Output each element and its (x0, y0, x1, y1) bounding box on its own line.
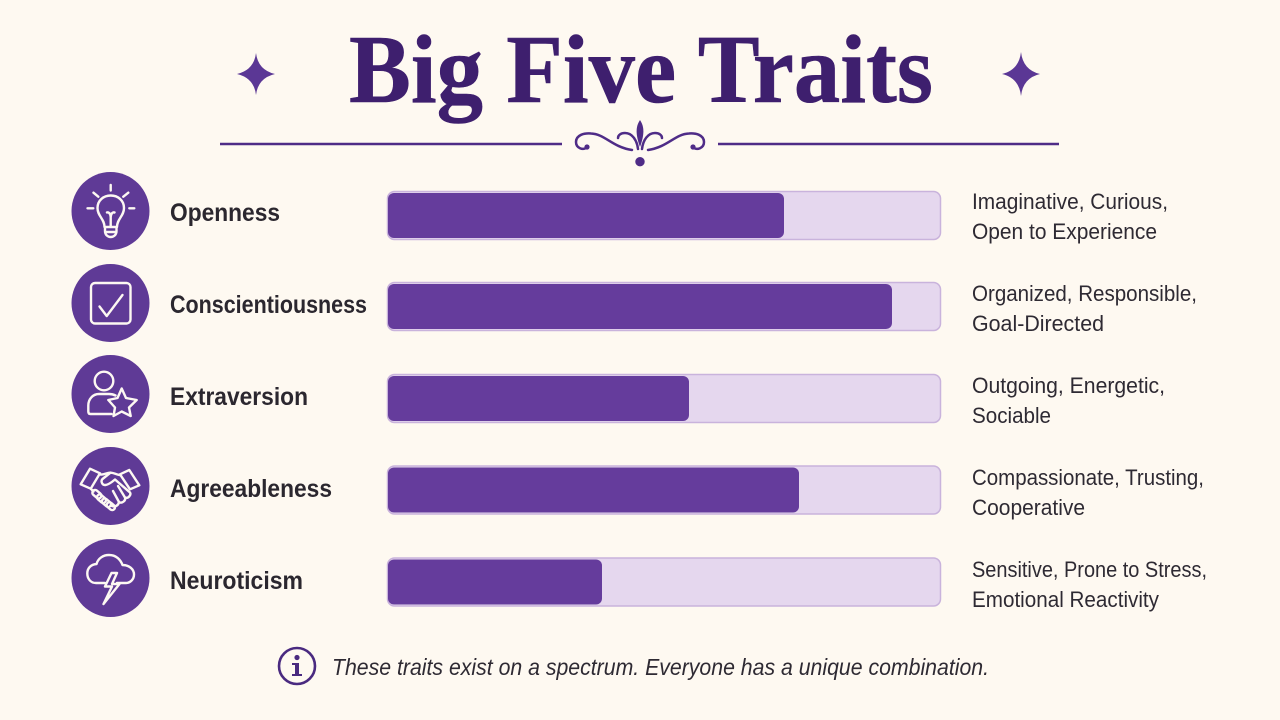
icon: light bulb (72, 172, 150, 250)
label: Openness (170, 199, 280, 227)
footer note (279, 648, 989, 684)
icon: storm cloud (72, 539, 150, 617)
description: Sociable (972, 403, 1051, 428)
label: Agreeableness (170, 475, 332, 503)
row: Agreeableness (72, 447, 1204, 525)
label: Conscientiousness (170, 291, 367, 319)
description (972, 189, 1168, 244)
icon: info (279, 648, 315, 684)
icon: person with star (72, 355, 150, 433)
label: Neuroticism (170, 567, 303, 595)
description (972, 465, 1204, 520)
description: Emotional Reactivity (972, 587, 1159, 612)
bar (388, 192, 940, 240)
description: Compassionate, Trusting, (972, 465, 1204, 490)
description: Imaginative, Curious, (972, 189, 1168, 214)
row: Openness (72, 172, 1168, 250)
bar (388, 374, 940, 422)
description (972, 557, 1207, 612)
bar (388, 282, 940, 330)
description: Cooperative (972, 495, 1085, 520)
row: Neuroticism (72, 539, 1207, 617)
description: Outgoing, Energetic, (972, 373, 1165, 398)
title divider with flourish (220, 120, 1059, 166)
description: Organized, Responsible, (972, 281, 1197, 306)
icon: handshake (72, 447, 150, 525)
icon: checkbox (72, 264, 150, 342)
bar (388, 466, 940, 514)
description: Open to Experience (972, 219, 1157, 244)
footer text: These traits exist on a spectrum. Everyone has a unique combination. (332, 654, 989, 680)
row: Extraversion (72, 355, 1165, 433)
icon: right sparkle (1002, 52, 1040, 96)
title: Big Five Traits (349, 16, 933, 124)
bar (388, 558, 940, 606)
label: Extraversion (170, 383, 308, 411)
description: Goal-Directed (972, 311, 1104, 336)
row: Conscientiousness (72, 264, 1197, 342)
description: Sensitive, Prone to Stress, (972, 557, 1207, 582)
icon: left sparkle (237, 53, 275, 95)
description (972, 281, 1197, 336)
description (972, 373, 1165, 428)
